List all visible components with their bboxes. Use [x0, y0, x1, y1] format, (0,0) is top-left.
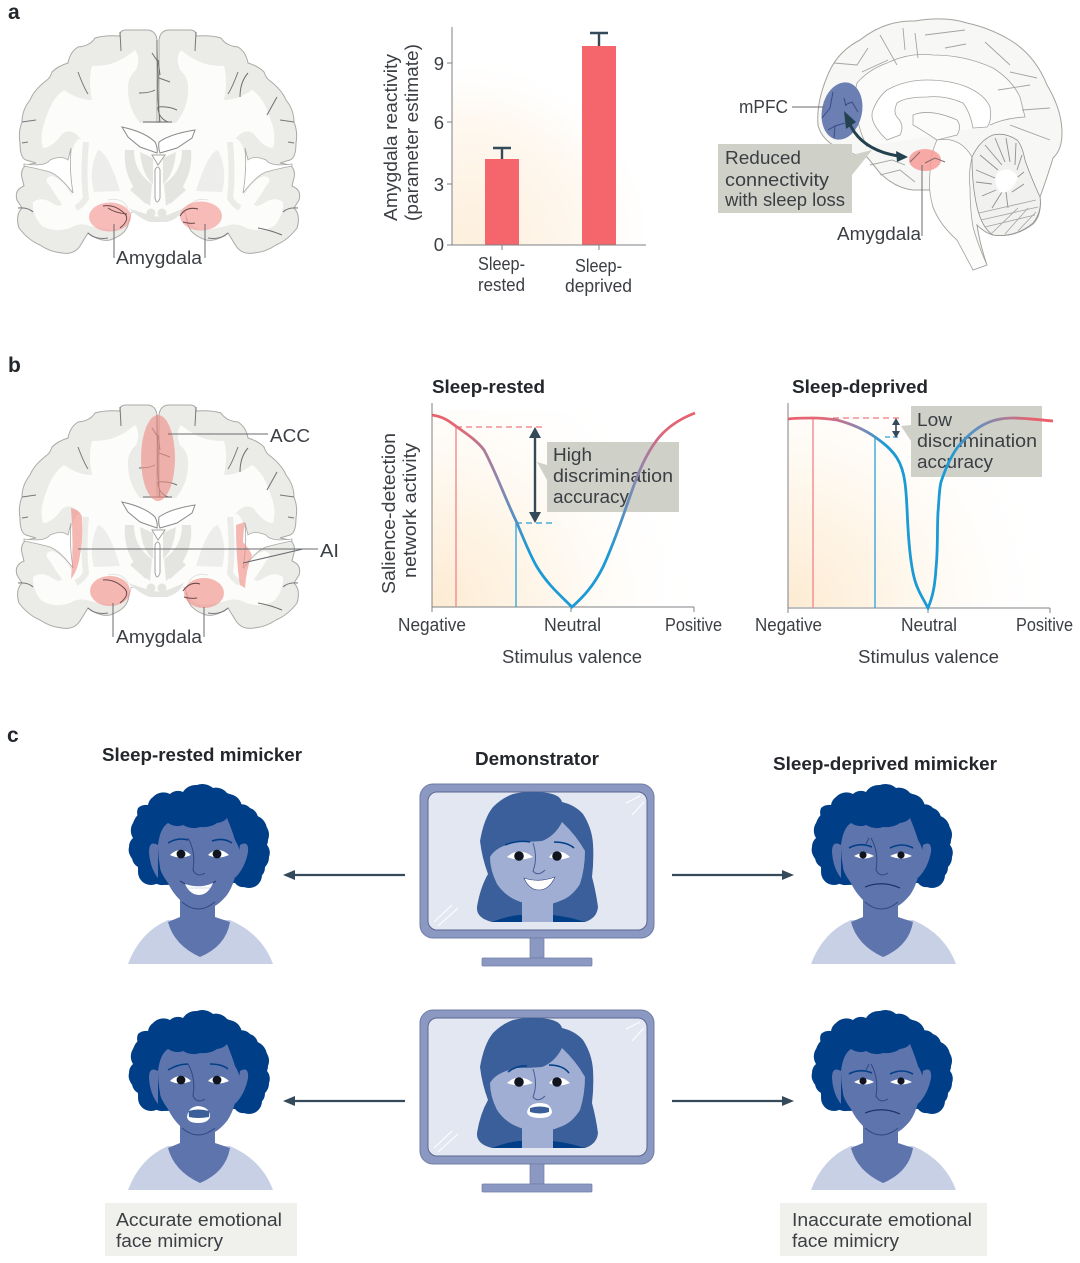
- heading: demonstrator: Demonstrator: [475, 748, 599, 769]
- mPFC region: [816, 78, 868, 144]
- monitor: demonstrator fearful: [420, 1010, 654, 1192]
- small double arrow: [892, 418, 900, 438]
- y-axis label: salience-detection network activity: Salience-detection: [378, 433, 399, 594]
- label: Amygdala: Amygdala: [116, 626, 203, 647]
- bar labels: [478, 253, 632, 296]
- callout: reduced connectivity: Reduced: [725, 147, 801, 168]
- bar chart: amygdala reactivity: [380, 27, 647, 296]
- callout: low discrimination accuracy: discrimination: [917, 430, 1037, 451]
- label: accurate emotional face mimicry: Accurate emotional: [116, 1209, 282, 1230]
- heading: Sleep-deprived: [792, 376, 928, 397]
- heading: Sleep-rested: [432, 376, 545, 397]
- x labels: Neutral: [901, 614, 957, 635]
- bars: [485, 46, 616, 245]
- axis values: 0: [434, 234, 444, 255]
- label: inaccurate emotional face mimicry: face mimicry: [792, 1230, 900, 1251]
- amygdala region: [909, 149, 941, 171]
- axis values: 3: [434, 174, 444, 195]
- chart: sleep-rested: [398, 376, 722, 667]
- y-axis label: [380, 44, 422, 221]
- x labels: Positive: [665, 614, 722, 635]
- y-axis label: Amygdala reactivity: [380, 53, 401, 221]
- label: ACC: ACC: [270, 425, 310, 446]
- arrow: demonstrator to deprived mimicker row 2: [672, 1096, 794, 1106]
- cerebellum: [972, 134, 1040, 236]
- bar labels: Sleep-: [575, 255, 622, 276]
- rested mimicker fearful: [128, 1010, 273, 1190]
- axis values: 9: [434, 53, 444, 74]
- highlighted regions: [71, 415, 252, 608]
- x labels: Negative: [398, 614, 466, 635]
- callout: high discrimination accuracy: High: [553, 444, 592, 465]
- label: AI: AI: [320, 540, 339, 561]
- label: accurate emotional face mimicry: [105, 1203, 297, 1256]
- label: accurate emotional face mimicry: face mimicry: [116, 1230, 224, 1251]
- monitor: demonstrator smiling: [420, 784, 654, 966]
- chart: sleep-deprived: [755, 376, 1073, 667]
- label: mPFC: mPFC: [739, 96, 788, 117]
- x labels: Positive: [1016, 614, 1073, 635]
- label: inaccurate emotional face mimicry: [780, 1203, 987, 1256]
- bar labels: rested: [478, 274, 525, 295]
- x labels: [398, 614, 722, 667]
- axis values: [434, 53, 444, 255]
- x labels: Neutral: [544, 614, 601, 635]
- response curve: [788, 418, 1053, 608]
- axis values: 6: [434, 112, 444, 133]
- deprived mimicker flat expression row 2: [811, 1010, 956, 1190]
- heading: sleep-deprived mimicker: Sleep-deprived mimicker: [773, 753, 997, 774]
- label: mPFC: [739, 96, 825, 117]
- label: inaccurate emotional face mimicry: Inaccurate emotional: [792, 1209, 972, 1230]
- label: Amygdala: Amygdala: [837, 223, 922, 244]
- label: amygdala: Amygdala: [116, 247, 203, 268]
- x labels: Stimulus valence: [502, 646, 642, 667]
- callout: low discrimination accuracy: Low: [917, 409, 953, 430]
- callout: low discrimination accuracy: accuracy: [917, 451, 994, 472]
- x labels: Negative: [755, 614, 822, 635]
- callout: high discrimination accuracy: discrimination: [553, 465, 673, 486]
- panel label c: c: [7, 724, 19, 747]
- response curve: [432, 413, 695, 607]
- deprived mimicker flat expression: [811, 784, 956, 964]
- panel label a: a: [8, 1, 20, 24]
- bar labels: deprived: [565, 275, 632, 296]
- panel b: coronal brain with salience network: [16, 405, 339, 647]
- rested mimicker smiling: [128, 784, 273, 964]
- double arrow: [529, 427, 541, 523]
- x labels: Stimulus valence: [858, 646, 999, 667]
- bar labels: Sleep-: [478, 253, 525, 274]
- callout: high discrimination accuracy: [537, 442, 679, 512]
- panel label b: b: [8, 354, 21, 377]
- x labels: [755, 614, 1073, 667]
- callout: reduced connectivity: connectivity: [725, 169, 830, 190]
- arrow: demonstrator to rested mimicker row 2: [283, 1096, 405, 1106]
- y-axis label: salience-detection network activity: network activity: [399, 442, 420, 578]
- connectivity arrow: [844, 111, 908, 162]
- arrow: demonstrator to rested mimicker: [283, 870, 405, 880]
- panel a: coronal brain with amygdala: [16, 30, 300, 268]
- arrow: demonstrator to deprived mimicker: [672, 870, 794, 880]
- label: Amygdala: [837, 165, 922, 244]
- callout: reduced connectivity: [718, 144, 872, 213]
- panel a: sagittal brain with connectivity: [718, 19, 1062, 270]
- callout: high discrimination accuracy: accuracy: [553, 486, 630, 507]
- heading: sleep-rested mimicker: Sleep-rested mimicker: [102, 744, 302, 765]
- y-axis label: (parameter estimate): [401, 44, 422, 221]
- y-axis label: salience-detection network activity: [378, 433, 420, 594]
- callout: low discrimination accuracy: [901, 406, 1042, 477]
- callout: reduced connectivity: with sleep loss: [724, 189, 845, 210]
- amygdala highlights: [89, 202, 222, 232]
